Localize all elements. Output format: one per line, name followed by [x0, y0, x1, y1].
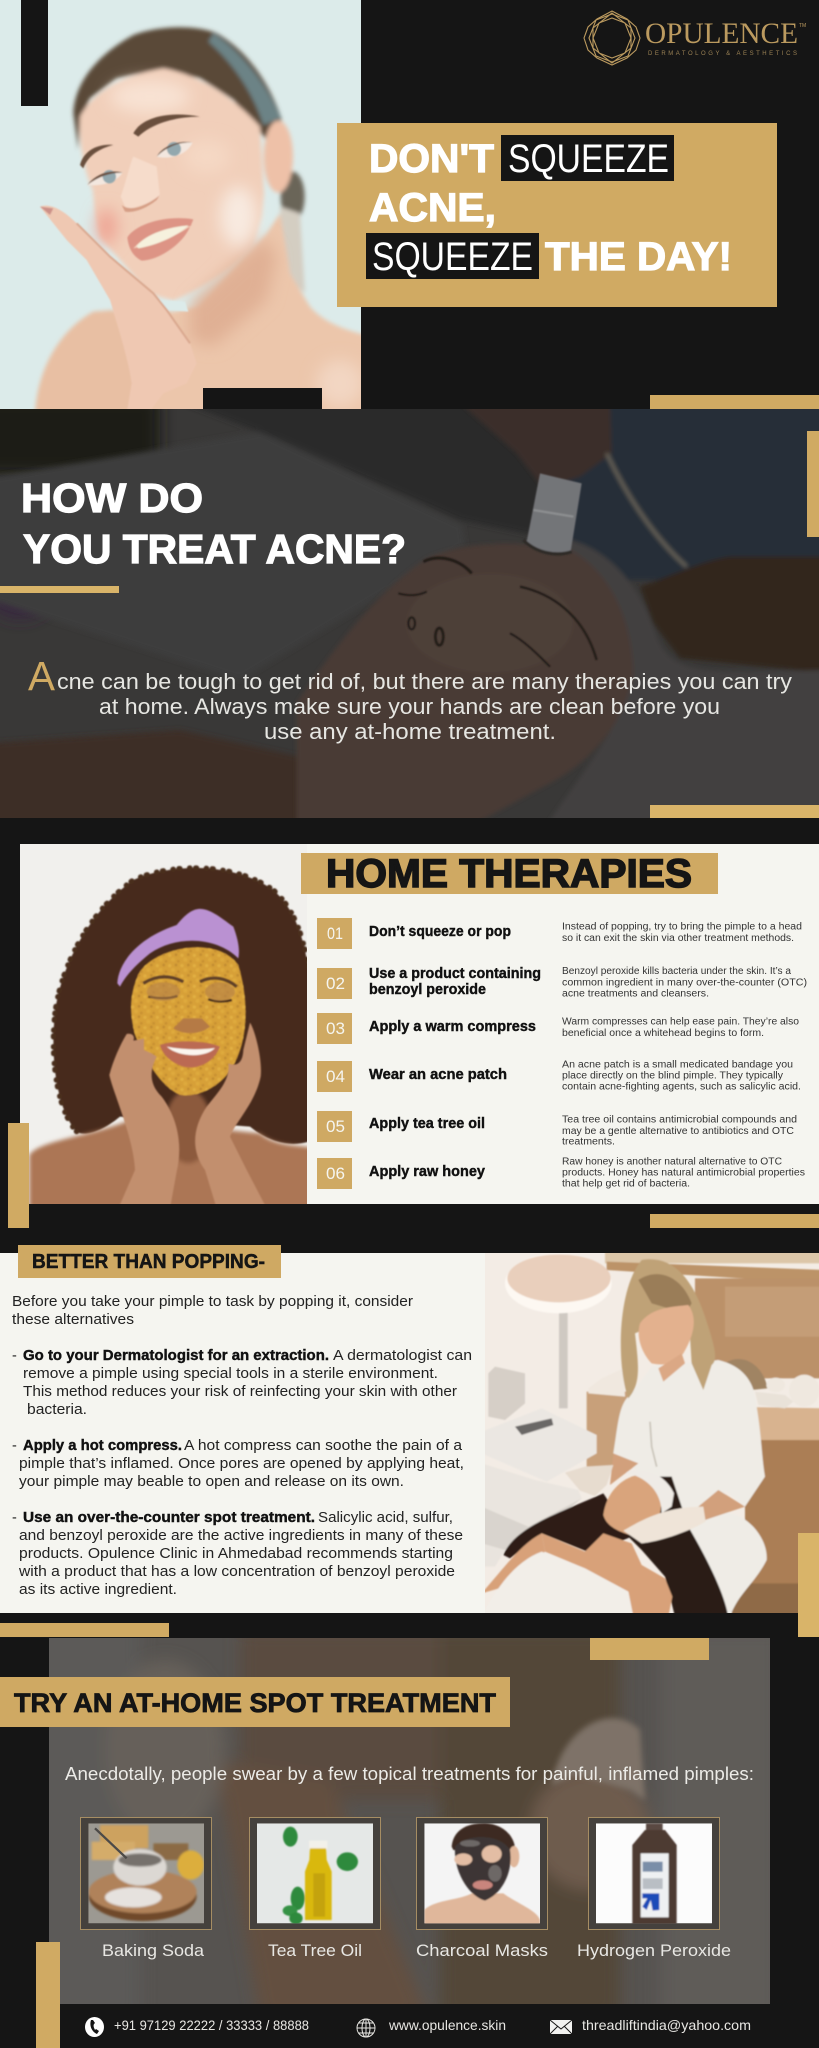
- footer bar: [0, 2004, 819, 2048]
- heading: better than popping: BETTER THAN POPPING-: [32, 1251, 265, 1273]
- photo: dermatologist with patient: [482, 1247, 819, 1617]
- heading: better than popping: [18, 1245, 281, 1278]
- therapy 02: benzoyl peroxide: [369, 982, 486, 998]
- decoration: black tab top: [21, 0, 48, 106]
- card: baking soda: [80, 1818, 212, 1930]
- therapy 04: place directly on the blind pimple. They typically: [562, 1070, 783, 1082]
- therapy 06: [317, 1156, 805, 1190]
- headline box: THE DAY!: [545, 235, 732, 279]
- therapy 02: Benzoyl peroxide kills bacteria under the skin. It’s a: [562, 966, 791, 977]
- tip: spot treatment: [12, 1510, 463, 1598]
- tip: dermatologist extraction: A dermatologist can: [333, 1348, 472, 1364]
- text: phone numbers: +91 97129 22222 / 33333 / 88888: [114, 2017, 309, 2033]
- panel: at-home spot treatment background photo: [49, 1638, 770, 2004]
- headline box: [337, 123, 777, 307]
- decoration: gold bar right: [807, 431, 819, 537]
- label: hydrogen peroxide: Hydrogen Peroxide: [577, 1941, 731, 1960]
- tip: spot treatment: Use an over-the-counter spot treatment.: [23, 1510, 315, 1526]
- heading: how do you treat acne: YOU TREAT ACNE?: [23, 526, 406, 572]
- therapy 02: Use a product containing: [369, 966, 541, 982]
- tip: hot compress: A hot compress can soothe the pain of a: [184, 1438, 463, 1454]
- therapy 06: that help get rid of bacteria.: [562, 1178, 690, 1190]
- intro text: [12, 1294, 413, 1328]
- therapy 03: beneficial once a whitehead begins to form.: [562, 1028, 764, 1039]
- therapy 05: 05: [326, 1117, 345, 1136]
- therapy 04: [317, 1060, 801, 1092]
- therapy 06: Apply raw honey: [369, 1164, 485, 1180]
- therapy 01: Don’t squeeze or pop: [369, 924, 511, 940]
- therapy 04: contain acne-fighting agents, such as salicylic acid.: [562, 1082, 801, 1092]
- therapy 04: Wear an acne patch: [369, 1067, 507, 1083]
- intro paragraph: A: [28, 653, 56, 699]
- lead sentence: Anecdotally, people swear by a few topical treatments for painful, inflamed pimples:: [65, 1763, 754, 1784]
- tip: spot treatment: as its active ingredient.: [19, 1582, 177, 1598]
- icon: globe: [357, 2019, 375, 2037]
- therapy 05: [317, 1111, 797, 1148]
- therapy 06: products. Honey has natural antimicrobial properties: [562, 1168, 805, 1178]
- therapy 01: 01: [327, 924, 343, 943]
- tip: spot treatment: and benzoyl peroxide are the active ingredients in many of these: [19, 1528, 463, 1544]
- therapy 02: 02: [326, 974, 345, 993]
- icon: phone: [85, 2017, 104, 2037]
- intro paragraph: use any at-home treatment.: [264, 719, 556, 744]
- therapy 06: 06: [326, 1164, 345, 1183]
- intro paragraph: at home. Always make sure your hands are clean before you: [99, 694, 720, 719]
- tip: dermatologist extraction: -: [12, 1348, 17, 1364]
- text: website: www.opulence.skin: [388, 2017, 506, 2033]
- panel: better than popping: [0, 1245, 819, 1617]
- icon: envelope: [550, 2020, 572, 2034]
- intro paragraph: cne can be tough to get rid of, but there are many therapies you can try: [57, 669, 792, 694]
- intro text: these alternatives: [12, 1312, 134, 1328]
- therapy 05: Tea tree oil contains antimicrobial compounds and: [562, 1114, 797, 1126]
- decoration: gold bar left: [0, 1623, 169, 1637]
- tip: hot compress: your pimple may beable to open and release on its own.: [19, 1474, 404, 1490]
- therapy 05: treatments.: [562, 1136, 615, 1148]
- tip: spot treatment: products. Opulence Clinic in Ahmedabad recommends starting: [19, 1546, 453, 1562]
- tip: hot compress: Apply a hot compress.: [23, 1438, 182, 1454]
- heading banner: try an at-home spot treatment: [0, 1677, 510, 1727]
- decoration: gold bar bottom right: [650, 805, 819, 818]
- headline box: SQUEEZE: [508, 137, 669, 181]
- decoration: gold bar left: [8, 1123, 29, 1228]
- tip: hot compress: -: [12, 1438, 17, 1454]
- therapy 01: Instead of popping, try to bring the pimple to a head: [562, 922, 802, 932]
- tip: dermatologist extraction: remove a pimple using special tools in a sterile environment.: [23, 1366, 438, 1382]
- heading banner: try an at-home spot treatment: TRY AN AT-HOME SPOT TREATMENT: [14, 1688, 496, 1718]
- decoration: black tab bottom: [203, 388, 322, 409]
- photo: woman with honey mask: [29, 864, 307, 1204]
- tip: dermatologist extraction: This method reduces your risk of reinfecting your skin with other: [23, 1384, 457, 1400]
- decoration: gold bar hero: [650, 395, 819, 409]
- therapy 02: common ingredient in many over-the-counter (OTC): [562, 978, 807, 988]
- therapy 05: Apply tea tree oil: [369, 1116, 485, 1132]
- decoration: gold underline: [0, 586, 119, 593]
- tip: hot compress: pimple that’s inflamed. Once pores are opened by applying heat,: [19, 1456, 464, 1472]
- card: charcoal masks: [416, 1818, 548, 1930]
- logo: Opulence: [584, 11, 806, 65]
- tip: dermatologist extraction: bacteria.: [27, 1402, 87, 1418]
- headline box: DON'T: [369, 137, 494, 181]
- decoration: gold bar right: [650, 1214, 819, 1228]
- therapy 03: 03: [326, 1019, 345, 1038]
- decoration: gold bar right of photo: [798, 1533, 819, 1637]
- hero photo: smiling woman: [0, 0, 367, 413]
- therapy 03: Warm compresses can help ease pain. They’re also: [562, 1016, 799, 1028]
- tip: spot treatment: with a product that has a low concentration of benzoyl peroxide: [18, 1564, 455, 1580]
- text: email: threadliftindia@yahoo.com: [582, 2017, 751, 2033]
- tip: dermatologist extraction: Go to your Dermatologist for an extraction.: [23, 1348, 329, 1364]
- therapy 04: 04: [326, 1067, 345, 1086]
- card: hydrogen peroxide: [588, 1818, 720, 1930]
- tip: hot compress: [12, 1438, 464, 1490]
- therapy 01: [317, 918, 802, 949]
- decoration: gold bar bottom left: [36, 1942, 60, 2048]
- label: tea tree oil: Tea Tree Oil: [268, 1941, 362, 1960]
- section: how do you treat acne background photo: [0, 390, 819, 830]
- logo: Opulence: DERMATOLOGY & AESTHETICS: [648, 51, 797, 57]
- therapy 01: so it can exit the skin via other treatment methods.: [562, 933, 794, 944]
- headline box: ACNE,: [369, 186, 496, 230]
- therapy 03: Apply a warm compress: [369, 1019, 536, 1035]
- label: baking soda: Baking Soda: [102, 1941, 205, 1960]
- intro text: Before you take your pimple to task by popping it, consider: [12, 1294, 413, 1310]
- label: charcoal masks: Charcoal Masks: [416, 1941, 548, 1960]
- logo: Opulence: OPULENCE: [645, 17, 798, 50]
- tip: spot treatment: -: [12, 1510, 17, 1526]
- therapy 04: An acne patch is a small medicated bandage you: [562, 1060, 793, 1070]
- decoration: gold tab top: [590, 1638, 709, 1660]
- heading: how do you treat acne: [21, 475, 406, 572]
- card: tea tree oil: [250, 1818, 380, 1930]
- therapy 02: [317, 966, 807, 1000]
- intro paragraph: [28, 653, 792, 744]
- heading: how do you treat acne: HOW DO: [21, 475, 203, 521]
- therapy 03: [317, 1013, 799, 1044]
- tip: spot treatment: Salicylic acid, sulfur,: [318, 1510, 453, 1526]
- therapy 06: Raw honey is another natural alternative to OTC: [562, 1156, 782, 1168]
- tip: dermatologist extraction: [12, 1348, 472, 1418]
- therapy 02: acne treatments and cleansers.: [562, 988, 709, 1000]
- panel: home therapies: [20, 844, 819, 1208]
- therapy 05: may be a gentle alternative to antibiotics and OTC: [562, 1126, 794, 1137]
- logo: Opulence: TM: [799, 23, 806, 29]
- headline box: SQUEEZE: [372, 235, 533, 279]
- heading: home therapies: HOME THERAPIES: [326, 852, 692, 896]
